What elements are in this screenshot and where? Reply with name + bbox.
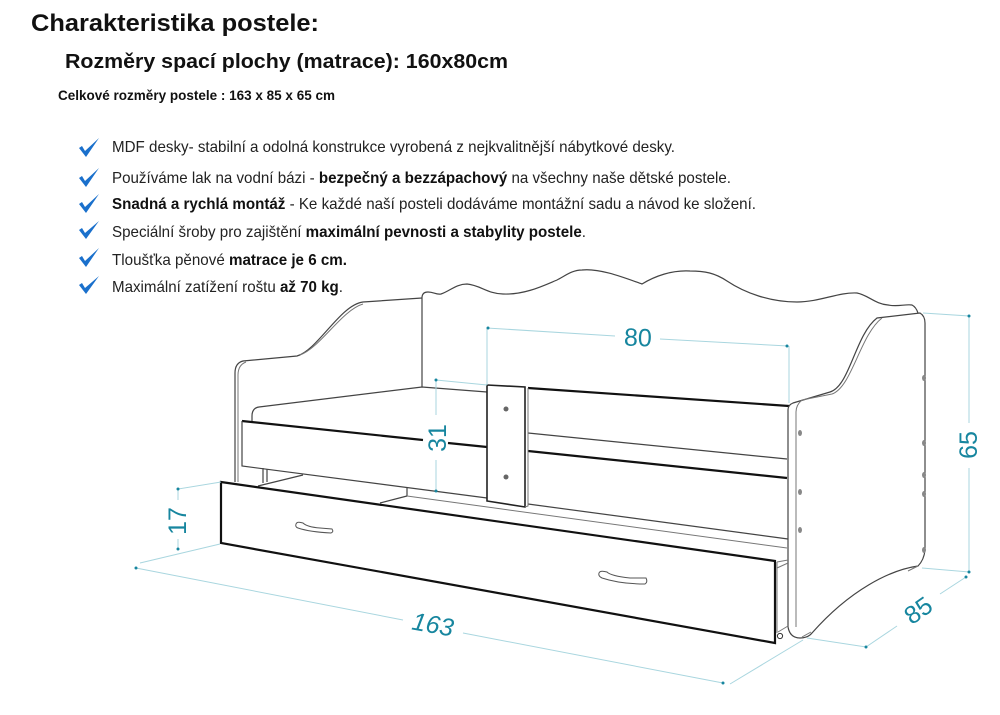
dimension: 80 xyxy=(486,324,789,403)
headboard wavy back xyxy=(422,270,918,387)
dimensions xyxy=(134,313,983,684)
icon: check 4 xyxy=(79,221,99,239)
dimension: 85: 85 xyxy=(899,591,938,630)
under-bed frame xyxy=(258,468,787,548)
dimension: 31: 31 xyxy=(424,424,452,452)
dimension: 163 xyxy=(134,566,724,684)
heading: overall size: Celkové rozměry postele : 163 x 85 x 65 cm xyxy=(58,87,335,103)
front rail right xyxy=(528,451,788,539)
dimension: 163: 163 xyxy=(410,608,456,642)
feature text 1: MDF desky- stabilní a odolná konstrukce vyrobená z nejkvalitnější nábytkové desky. xyxy=(112,139,675,156)
right armrest xyxy=(788,313,926,638)
feature text 5: Tloušťka pěnové matrace je 6 cm. xyxy=(112,252,347,269)
left armrest xyxy=(235,298,422,482)
feature text 4: Speciální šroby pro zajištění maximální pevnosti a stabylity postele. xyxy=(112,224,586,241)
drawer wheel xyxy=(777,633,783,639)
feature text 2: Používáme lak na vodní bázi - bezpečný a bezzápachový na všechny naše dětské postele. xyxy=(112,170,731,187)
icon: check 6 xyxy=(79,276,99,294)
title: Charakteristika postele: xyxy=(31,10,319,37)
icon: check 5 xyxy=(79,248,99,267)
heading: mattress size: Rozměry spací plochy (matrace): 160x80cm xyxy=(65,51,508,73)
upper rail top xyxy=(528,388,789,406)
icon: check 2 xyxy=(79,168,99,187)
mattress top xyxy=(252,387,487,421)
handle left xyxy=(296,522,333,533)
dimension: 85 xyxy=(730,576,968,684)
dimension: 17 xyxy=(140,482,221,563)
icon: check 3 xyxy=(79,194,99,213)
handle right xyxy=(599,571,647,584)
drawer xyxy=(221,482,788,643)
dimension: 65: 65 xyxy=(955,431,983,459)
icon: check 1 xyxy=(79,138,99,157)
feature text 6: Maximální zatížení roštu až 70 kg. xyxy=(112,279,343,296)
dimension: 65 xyxy=(922,313,983,574)
dimension: 17: 17 xyxy=(164,507,192,535)
feature text 3: Snadná a rychlá montáž - Ke každé naší posteli dodáváme montážní sadu a návod ke složení. xyxy=(112,196,756,213)
mattress back edge xyxy=(528,433,787,459)
dimension: 31 xyxy=(424,378,487,492)
rail post xyxy=(487,385,528,507)
bed drawing xyxy=(221,270,926,643)
dimension: 80: 80 xyxy=(624,324,652,352)
feature list xyxy=(79,138,756,296)
front rail left xyxy=(242,421,487,498)
